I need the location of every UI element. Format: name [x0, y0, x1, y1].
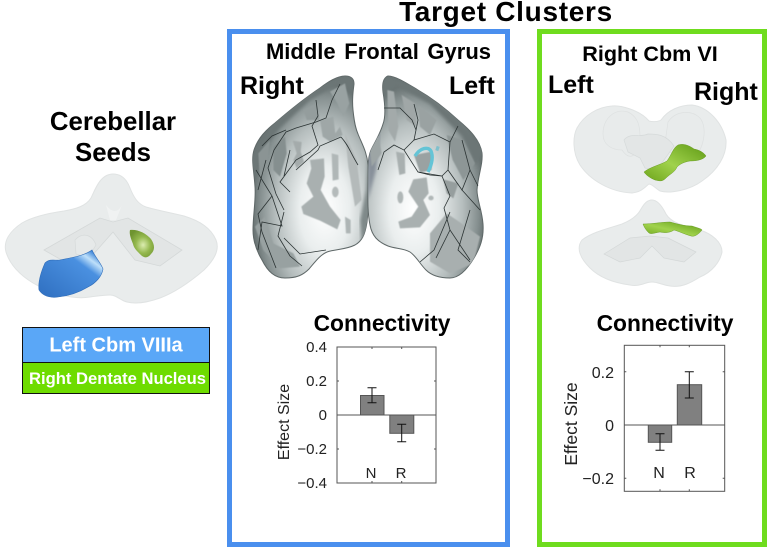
x labels: R: [684, 465, 696, 482]
bar chart: connectivity, frontal: [276, 339, 436, 492]
legend item: Right Dentate Nucleus: Right Dentate Nucleus: [29, 369, 206, 388]
seed: right dentate nucleus: [130, 230, 154, 257]
label: Left: Left: [548, 71, 594, 99]
y axis ticks: [582, 365, 614, 488]
y axis ticks: −0.4: [297, 475, 327, 492]
y axis ticks: 0.2: [592, 365, 614, 382]
label: Right: Right: [240, 72, 305, 100]
y axis ticks: −0.2: [582, 471, 614, 488]
cluster: upper view: [644, 144, 706, 181]
cerebellum: upper view: [574, 105, 726, 193]
y axis ticks: [297, 339, 327, 492]
heading: Cerebellar Seeds: Cerebellar: [50, 108, 176, 136]
x labels: [366, 465, 407, 482]
heading: Right Cbm VI: Right Cbm VI: [582, 41, 718, 66]
cluster: lower view: [643, 222, 702, 236]
y axis ticks: 0: [605, 418, 614, 435]
legend item: Left Cbm VIIIa: Left Cbm VIIIa: [49, 334, 184, 356]
y axis label: Effect Size: [561, 382, 581, 466]
legend item: Right Dentate Nucleus: [22, 362, 210, 394]
seed: left cerebellar lobule VIIIa: [39, 250, 103, 297]
panel: right cerebellum VI: [540, 32, 764, 544]
heading: Middle Frontal Gyrus: Middle Frontal Gyrus: [266, 39, 491, 64]
label: Left: Left: [449, 72, 496, 100]
cerebellum with seeds: [5, 174, 217, 303]
heading: Connectivity: Connectivity: [597, 310, 734, 336]
x labels: [653, 465, 696, 482]
label: Right: Right: [694, 78, 759, 106]
panel: middle frontal gyrus: [230, 32, 508, 544]
activation cluster: [415, 148, 439, 172]
bar R: [390, 415, 414, 433]
x labels: N: [366, 465, 376, 482]
y axis ticks: −0.2: [297, 441, 327, 458]
y axis ticks: 0.2: [306, 373, 327, 390]
cortical sulcal patches: [255, 83, 362, 268]
x labels: N: [653, 465, 665, 482]
cortical sulcal patches: [370, 90, 480, 273]
brain: right hemisphere: [250, 76, 372, 278]
legend: [22, 328, 210, 394]
bar R: [677, 385, 702, 425]
error bars: [656, 372, 694, 450]
heading: Cerebellar Seeds: Seeds: [75, 139, 151, 167]
brain: left hemisphere: [368, 76, 484, 278]
heading: Connectivity: Connectivity: [314, 310, 451, 336]
bar chart: connectivity, cerebellum: [561, 345, 725, 491]
error bars: [368, 388, 406, 442]
x labels: R: [396, 465, 407, 482]
bar N: [648, 425, 672, 442]
y axis label: Effect Size: [276, 384, 293, 460]
cerebellum: lower view: [579, 200, 722, 286]
legend item: Left Cbm VIIIa: [22, 328, 210, 362]
y axis ticks: 0.4: [306, 339, 327, 356]
bar N: [360, 396, 384, 415]
heading: Cerebellar Seeds: [50, 108, 176, 167]
y axis ticks: 0: [319, 407, 327, 424]
